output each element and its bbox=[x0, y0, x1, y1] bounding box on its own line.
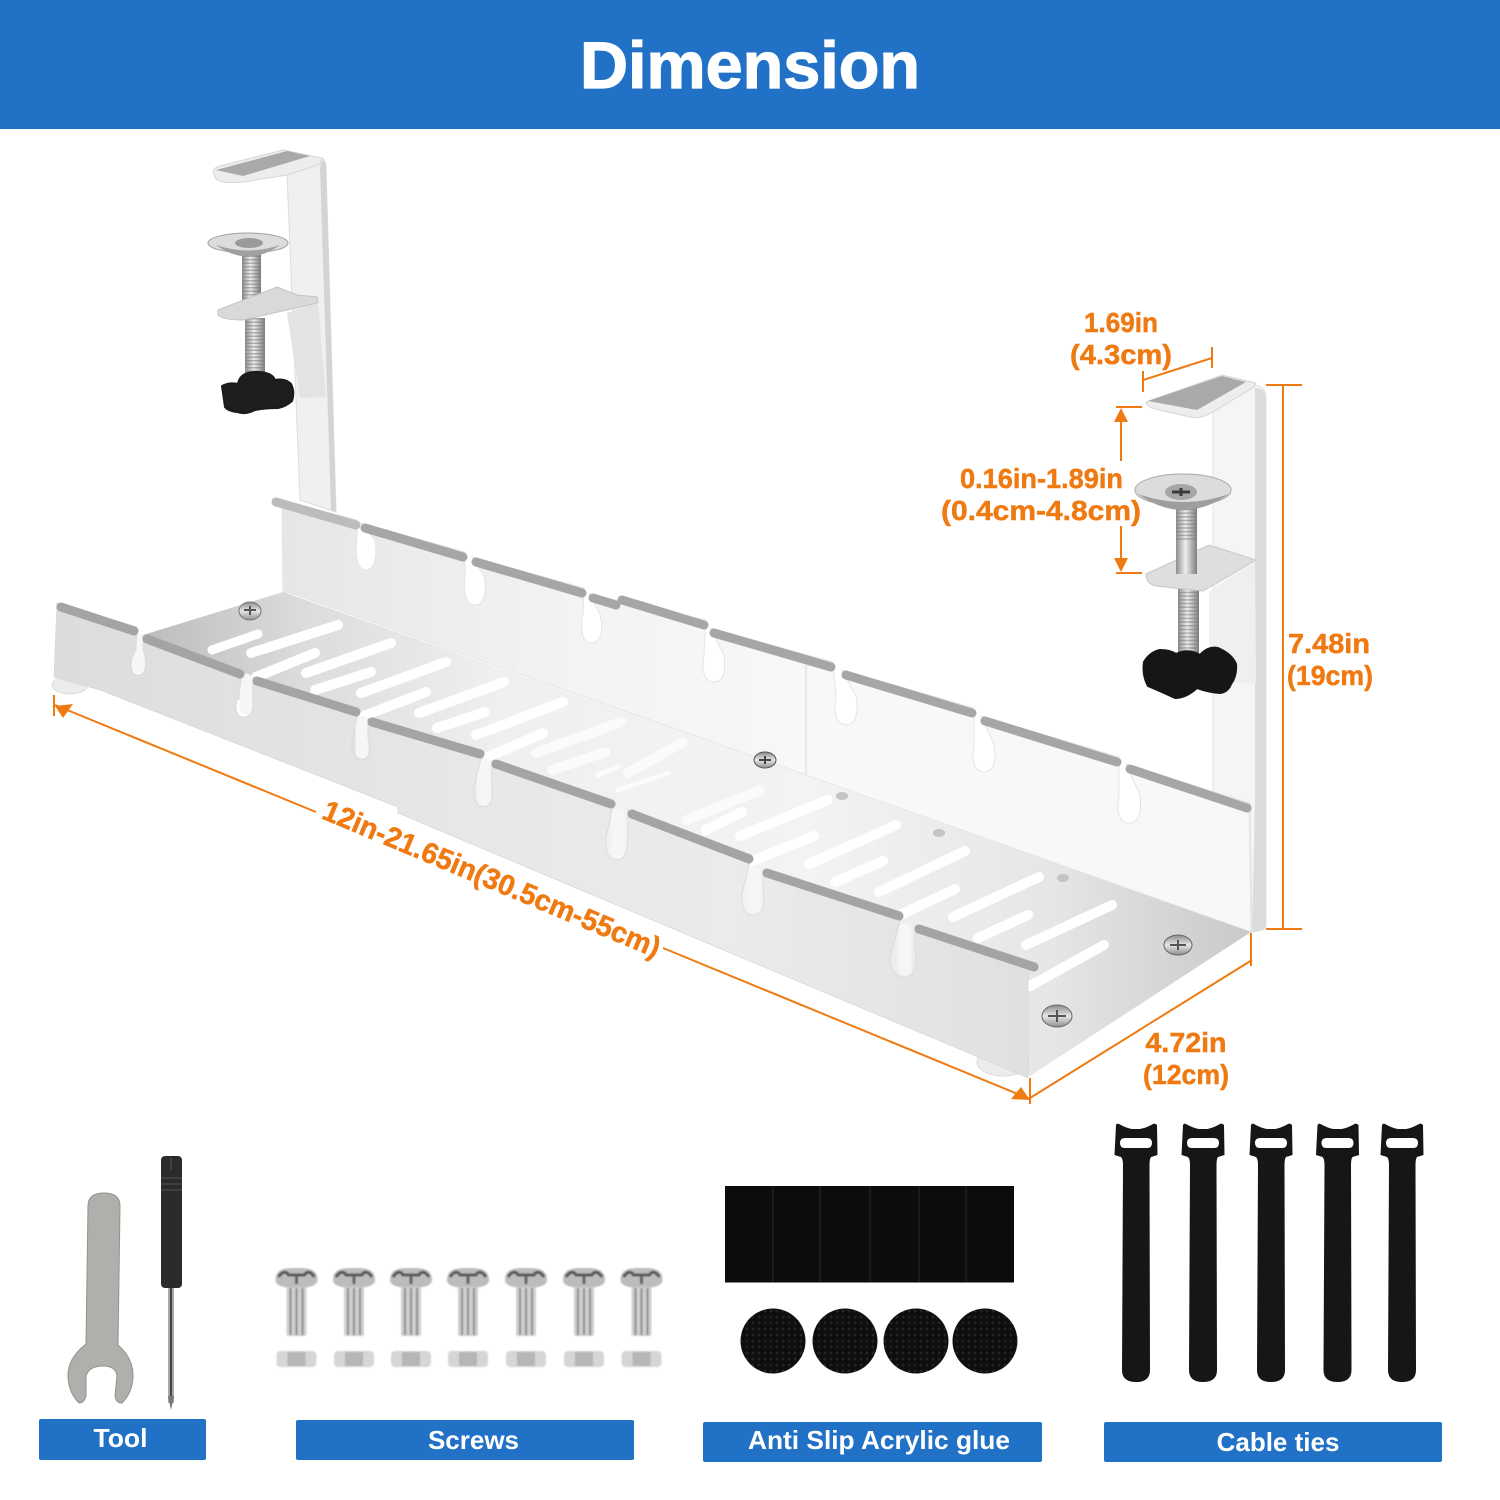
tray: small floor holes bbox=[836, 792, 1069, 882]
dimension: clamp range: (0.4cm-4.8cm) bbox=[941, 495, 1141, 526]
tray: rubber feet bbox=[52, 676, 1029, 1076]
icon: screwdriver bbox=[161, 1156, 182, 1410]
dimension: clamp depth bbox=[1070, 307, 1212, 392]
title banner bbox=[0, 0, 1500, 129]
heading: Dimension: Dimension bbox=[580, 28, 920, 102]
label: Tool: Tool bbox=[94, 1423, 148, 1453]
label: Anti Slip Acrylic glue: Anti Slip Acrylic glue bbox=[748, 1425, 1010, 1455]
label: length text: 12in-21.65in(30.5cm-55cm) bbox=[318, 795, 665, 964]
label: Tool bbox=[39, 1419, 206, 1460]
tray: keyhole openings bbox=[139, 640, 905, 969]
tray: front wall bbox=[54, 603, 1037, 1078]
label: Screws bbox=[296, 1420, 634, 1460]
cable tray: back wall bbox=[272, 498, 1251, 932]
right clamp bracket bbox=[1135, 375, 1266, 932]
label: depth text: 1.69in bbox=[1084, 307, 1158, 338]
tray: back wall top folds bbox=[276, 502, 1247, 808]
tray: front wall top folds bbox=[61, 607, 1034, 967]
dimension: clamp depth: (4.3cm) bbox=[1070, 339, 1172, 370]
left clamp bracket bbox=[208, 150, 336, 512]
tray: floor plate bbox=[143, 592, 1251, 1076]
tray: floor slots bbox=[212, 625, 1112, 986]
dimension: tray width: (12cm) bbox=[1143, 1059, 1229, 1090]
label: width text: 4.72in bbox=[1146, 1027, 1226, 1058]
label: Cable ties bbox=[1104, 1422, 1442, 1462]
label: Screws: Screws bbox=[428, 1425, 519, 1455]
dimension: bracket height bbox=[1266, 385, 1373, 929]
tray: back wall seam bbox=[805, 665, 807, 775]
icon: tray screws bbox=[239, 602, 1192, 1027]
label: height text: 7.48in bbox=[1288, 628, 1370, 659]
dimension: tray width bbox=[1030, 933, 1252, 1098]
icon: black knob bbox=[1144, 648, 1236, 698]
icon: cable ties bbox=[1114, 1124, 1424, 1382]
icon: wrench bbox=[68, 1193, 133, 1403]
label: Anti Slip Acrylic glue bbox=[703, 1422, 1042, 1462]
dimension: clamp range bbox=[941, 407, 1142, 573]
dimension: tray length bbox=[54, 695, 1030, 1104]
icon: screws and nuts bbox=[276, 1268, 662, 1367]
label: range text: 0.16in-1.89in bbox=[960, 463, 1123, 494]
dimension: bracket height: (19cm) bbox=[1287, 660, 1373, 691]
label: Cable ties: Cable ties bbox=[1217, 1427, 1339, 1457]
icon: anti slip pads bbox=[725, 1186, 1018, 1374]
